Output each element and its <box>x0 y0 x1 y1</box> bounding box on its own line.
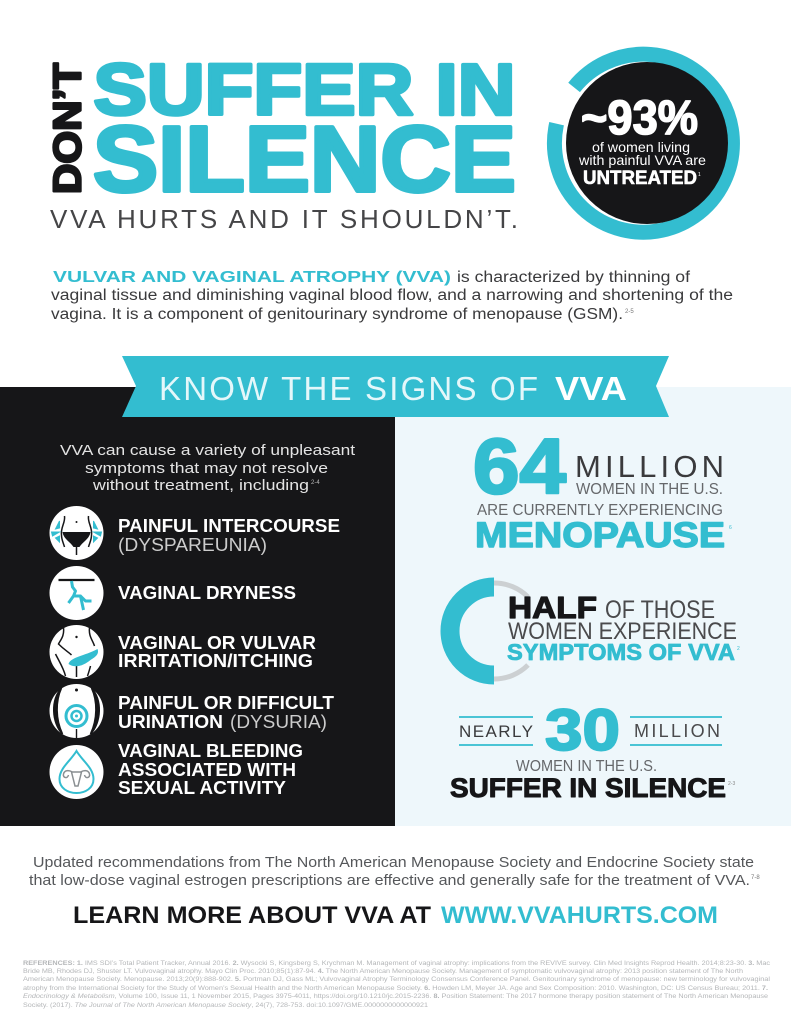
intro paragraph: VULVAR AND VAGINAL ATROPHY (VVA) <box>53 269 451 286</box>
stat: 64 million: WOMEN IN THE U.S. <box>576 481 723 498</box>
icon: painful urination <box>50 684 104 738</box>
label: painful intercourse: PAINFUL INTERCOURSE <box>118 516 340 536</box>
stat: half of those women: 2 <box>737 646 740 652</box>
label: vaginal bleeding: VAGINAL BLEEDING <box>118 741 303 761</box>
stat: nearly 30 million: WOMEN IN THE U.S. <box>516 758 657 775</box>
references: Endocrinology & Metabolism , Volume 100, Issue 11, 1 November 2015, Pages 3975-4011, https://doi.org/10.1210/jc.2015-2236. 8. Position Statement: The 2017 hormone therapy position statement of The North American Menopause <box>23 993 769 1000</box>
stat: half of those women <box>507 590 740 665</box>
panel: symptoms list <box>50 442 356 799</box>
stat: half of those women: OF THOSE <box>605 596 715 624</box>
label: painful urination: (DYSURIA) <box>230 712 327 732</box>
stat: half of those women: SYMPTOMS OF VVA <box>507 639 735 665</box>
icon: vaginal bleeding <box>50 745 104 799</box>
label: painful intercourse: (DYSPAREUNIA) <box>118 535 267 555</box>
panel: statistics <box>450 422 740 803</box>
recommendation text <box>29 854 760 889</box>
stat: half of those women: WOMEN EXPERIENCE <box>508 618 737 645</box>
references: American Menopause Society. Menopause. 2013;20(9):888-902. 5. Portman DJ, Gass ML; Vulvovaginal Atrophy Terminology Consensus Conference Panel. Genitourinary syndrome of menopause: new terminology for vulvovaginal <box>23 976 770 983</box>
label: vaginal bleeding <box>118 741 303 798</box>
recommendation text: that low-dose vaginal estrogen prescriptions are effective and generally safe for the treatment of VVA. <box>29 872 750 889</box>
chart: half ring <box>450 583 528 679</box>
intro paragraph: 2-5 <box>625 309 634 315</box>
label: painful urination: URINATION <box>118 712 223 732</box>
stat: nearly 30 million: NEARLY <box>459 722 533 741</box>
subtitle: VVA HURTS AND IT SHOULDN’T. <box>50 204 518 234</box>
stat: 64 million: 6 <box>729 525 732 531</box>
intro paragraph: vaginal tissue and diminishing vaginal blood flow, and a narrowing and shortening of the <box>51 287 733 304</box>
recommendation text: Updated recommendations from The North American Menopause Society and Endocrine Society state <box>33 854 754 871</box>
stat: 64 million: ARE CURRENTLY EXPERIENCING <box>477 502 723 519</box>
symptoms intro text: symptoms that may not resolve <box>85 460 328 477</box>
label: painful intercourse <box>118 516 340 555</box>
panel: statistics background <box>395 387 791 826</box>
stat: 64 million: MENOPAUSE <box>475 516 725 555</box>
label: vaginal bleeding: ASSOCIATED WITH <box>118 760 296 780</box>
label: vaginal dryness: VAGINAL DRYNESS <box>118 583 296 603</box>
label: painful urination: PAINFUL OR DIFFICULT <box>118 693 334 713</box>
stat: half of those women: HALF <box>508 590 597 625</box>
title: Don't Suffer in Silence <box>46 50 516 211</box>
recommendation text: 7-8 <box>751 875 760 881</box>
intro paragraph: vagina. It is a component of genitourinary syndrome of menopause (GSM). <box>51 306 623 323</box>
banner: know the signs of VVA: VVA <box>555 370 627 407</box>
call to action: WWW.VVAHURTS.COM <box>441 902 718 929</box>
symptoms intro text: 2-4 <box>311 480 320 486</box>
stat badge: 93 percent untreated <box>554 54 732 232</box>
stat: nearly 30 million: SUFFER IN SILENCE <box>450 773 726 803</box>
icon: irritation and itching <box>50 625 104 679</box>
symptoms intro text: without treatment, including <box>92 477 309 494</box>
icon: painful intercourse <box>50 506 104 560</box>
references: Bride MB, Rhodes DJ, Shuster LT. Vulvovaginal atrophy. Mayo Clin Proc. 2010;85(1):87-94. 4. The North American Menopause Society. Management of symptomatic vulvovaginal atrophy: 2013 position statement of The North <box>23 968 744 975</box>
big figure: ~93% <box>581 92 698 145</box>
references: atrophy from the International Society for the Study of Women’s Sexual Health and the North American Menopause Society. 6. Howden LM, Meyer JA. Age and Sex Composition: 2010. Washington, DC: US Census Bureau; 2011. 7. <box>23 985 768 992</box>
references: Society. (2017). The Journal of The North American Menopause Society , 24(7), 728-753. doi:10.1097/GME.0000000000000921 <box>23 1002 429 1009</box>
headline line: Suffer In: SUFFER IN <box>94 50 516 130</box>
label: irritation and itching: VAGINAL OR VULVAR <box>118 633 316 653</box>
stat: nearly 30 million: MILLION <box>634 721 720 741</box>
banner: know the signs of VVA: KNOW THE SIGNS OF <box>159 370 538 407</box>
references: REFERENCES: 1. IMS SDI’s Total Patient Tracker, Annual 2016. 2. Wysocki S, Kingsberg S, Krychman M. Management of vaginal atrophy: implications from the REVIVE survey. Clin Med Insights Reprod Health. 2014;8:23-30. 3. Mac <box>23 960 770 967</box>
vertical word: Don't: DON’T <box>46 63 90 194</box>
intro paragraph: is characterized by thinning of <box>457 269 691 286</box>
stat badge: 93 percent untreated: with painful VVA are <box>578 152 706 168</box>
panel: symptoms background <box>0 387 395 826</box>
stat badge: 93 percent untreated: 1 <box>698 172 701 178</box>
stat: nearly 30 million: 30 <box>545 698 620 763</box>
badge text: of women living <box>592 139 690 155</box>
teal progress ring <box>554 54 732 232</box>
call to action <box>73 902 718 929</box>
stat: 64 million <box>473 422 732 555</box>
black disc <box>566 62 728 224</box>
stat: 64 million: MILLION <box>575 449 724 484</box>
label: painful urination <box>118 693 334 732</box>
intro paragraph <box>51 269 733 323</box>
stat: nearly 30 million <box>450 698 735 803</box>
label: irritation and itching <box>118 633 316 671</box>
label: irritation and itching: IRRITATION/ITCHING <box>118 651 313 671</box>
call to action: LEARN MORE ABOUT VVA AT <box>73 902 431 929</box>
stat badge: 93 percent untreated: UNTREATED <box>583 168 697 189</box>
stat: nearly 30 million: 2-3 <box>728 781 735 787</box>
references <box>23 960 770 1009</box>
headline line: Silence: SILENCE <box>93 107 516 211</box>
icon: vaginal dryness <box>50 566 104 620</box>
symptoms intro text: VVA can cause a variety of unpleasant <box>60 442 356 459</box>
symptoms intro text <box>60 442 356 494</box>
stat: 64 million: 64 <box>473 422 566 510</box>
label: vaginal bleeding: SEXUAL ACTIVITY <box>118 778 286 798</box>
banner: know the signs of VVA <box>122 356 669 417</box>
